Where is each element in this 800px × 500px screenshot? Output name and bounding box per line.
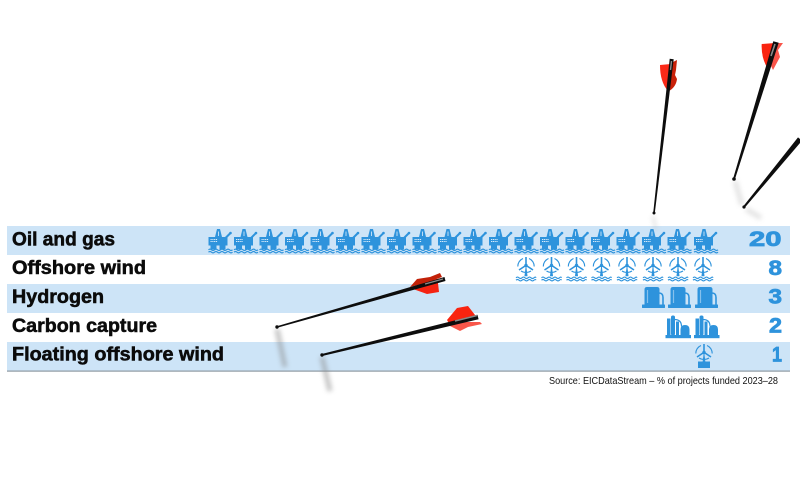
icon: floating wind turbine <box>696 344 712 368</box>
icons: 20 oil rigs <box>208 229 718 253</box>
row: Offshore wind <box>12 256 782 281</box>
row: Carbon capture: Carbon capture <box>12 315 157 337</box>
arrow: middle upper <box>275 273 446 367</box>
value: 8: 8 <box>768 256 782 280</box>
row: Floating offshore wind: Floating offshore wind <box>12 344 224 366</box>
row: Floating offshore wind <box>12 342 782 368</box>
value: 20: 20 <box>749 227 782 251</box>
arrow: middle lower <box>320 306 482 391</box>
row: Hydrogen: Hydrogen <box>12 286 104 308</box>
row: Offshore wind: Offshore wind <box>12 257 146 279</box>
value: 2: 2 <box>769 314 782 338</box>
row: Hydrogen <box>12 284 782 308</box>
icons: 3 hydrogen tanks <box>642 287 718 308</box>
icons: 8 offshore wind turbines <box>516 257 713 281</box>
arrow: top right <box>732 41 783 205</box>
table bands <box>7 226 790 372</box>
row: Oil and gas <box>12 227 782 253</box>
value: 3: 3 <box>768 284 782 308</box>
row: Carbon capture <box>12 314 782 338</box>
arrow: top centre <box>652 59 677 230</box>
arrow: far right, cut off <box>742 137 800 218</box>
icons: 2 carbon capture plants <box>666 316 720 338</box>
value: 1: 1 <box>772 342 782 366</box>
row: Oil and gas: Oil and gas <box>12 228 115 250</box>
